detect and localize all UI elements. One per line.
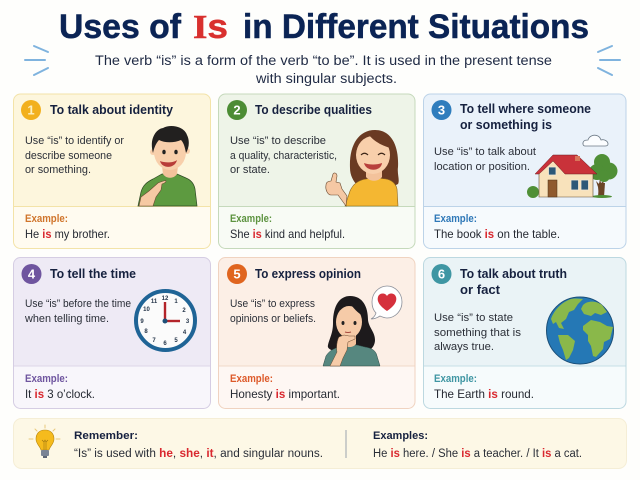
illustration: globe (546, 297, 614, 364)
description 2 (230, 135, 337, 176)
badge 1: 1 (27, 102, 35, 118)
illustration: smiling girl thumbs up (326, 130, 399, 206)
description 5: opinions or beliefs. (230, 313, 316, 325)
description 4: Use “is” before the time (25, 298, 131, 310)
title: Is (193, 8, 228, 46)
badge 1 (21, 100, 41, 120)
badge 6 (432, 264, 452, 284)
title: Uses of (59, 8, 182, 46)
example label 3: Example: (434, 213, 477, 225)
decoration: right rays (598, 46, 620, 75)
panel: remember bar (14, 418, 626, 468)
title: in Different Situations (243, 8, 589, 46)
panel: opinion (218, 258, 415, 408)
example label 1: Example: (25, 213, 68, 225)
illustration: clock showing 3 o'clock: 2 (182, 308, 186, 314)
illustration: clock showing 3 o'clock: 1 (174, 299, 178, 305)
examples text: He is here. / She is a teacher. / It is a cat. (373, 448, 582, 460)
description 3: location or position. (434, 161, 530, 173)
illustration: clock showing 3 o'clock: 5 (174, 338, 178, 344)
example label 2: Example: (230, 213, 272, 225)
description 5 (230, 298, 316, 325)
example label 5: Example: (230, 373, 273, 385)
title (59, 8, 589, 46)
heading 6: or fact (460, 282, 501, 297)
illustration: clock showing 3 o'clock: 4 (183, 330, 187, 336)
badge 4: 4 (28, 266, 36, 282)
description 4: when telling time. (24, 313, 109, 325)
badge 5 (227, 264, 247, 284)
description 6: always true. (434, 341, 494, 353)
description 1: or something. (25, 164, 91, 176)
illustration: clock showing 3 o'clock: 12 (162, 296, 169, 302)
description 1: Use “is” to identify or (25, 135, 124, 147)
heading 3 (460, 101, 591, 132)
description 1: describe someone (25, 150, 112, 162)
subtitle (95, 53, 552, 86)
decoration: left rays (25, 46, 48, 75)
example sentence 3: The book is on the table. (434, 227, 560, 241)
heading 5: To express opinion (255, 266, 361, 281)
remember text (74, 430, 323, 460)
illustration: clock showing 3 o'clock: 9 (140, 319, 144, 325)
heading 3: or something is (460, 117, 552, 132)
heading 4: To tell the time (50, 266, 136, 281)
icon: speech bubble with heart (371, 286, 402, 319)
description 6: Use “is” to state (434, 312, 513, 324)
example sentence 6: The Earth is round. (434, 387, 534, 401)
example sentence 2: She is kind and helpful. (230, 227, 345, 241)
description 2: or state. (230, 164, 270, 176)
example sentence 1: He is my brother. (25, 227, 110, 241)
description 6 (434, 312, 521, 353)
illustration: clock showing 3 o'clock (136, 291, 195, 350)
illustration: clock showing 3 o'clock: 7 (152, 338, 156, 344)
icon: light bulb (29, 425, 60, 458)
illustration: clock showing 3 o'clock: 3 (186, 319, 190, 325)
subtitle: The verb “is” is a form of the verb “to be”. It is used in the present tense (95, 53, 552, 68)
panel: time (14, 258, 210, 408)
badge 4 (22, 264, 42, 284)
examples text: Examples: (373, 430, 428, 442)
illustration: clock showing 3 o'clock: 6 (163, 341, 167, 347)
panel: location (424, 94, 626, 248)
example label 4: Example: (25, 373, 68, 385)
badge 2: 2 (233, 102, 241, 118)
illustration: boy pointing at himself (138, 126, 197, 206)
badge 6: 6 (438, 266, 445, 282)
example sentence 4: It is 3 o’clock. (25, 387, 95, 401)
badge 2 (227, 100, 247, 120)
examples text (373, 430, 582, 460)
badge 3 (432, 100, 452, 120)
heading 2: To describe qualities (255, 102, 372, 117)
description 1 (25, 135, 124, 176)
description 2: Use “is” to describe (230, 135, 326, 147)
remember text: “Is” is used with he, she, it, and singular nouns. (74, 448, 323, 460)
subtitle: with singular subjects. (255, 71, 397, 86)
description 4 (24, 298, 131, 325)
panel: truth or fact (424, 258, 626, 408)
panel: qualities (218, 94, 415, 248)
description 2: a quality, characteristic, (230, 150, 337, 162)
panel: identity (14, 94, 210, 248)
description 3 (434, 146, 537, 173)
example sentence 5: Honesty is important. (230, 387, 340, 401)
heading 6 (460, 266, 567, 297)
example label 6: Example: (434, 373, 477, 385)
badge 3: 3 (438, 102, 445, 118)
heading 6: To talk about truth (460, 266, 567, 281)
illustration: clock showing 3 o'clock: 11 (151, 299, 158, 305)
badge 5: 5 (233, 266, 241, 282)
description 3: Use “is” to talk about (434, 146, 537, 158)
illustration: house, tree and cloud (527, 135, 618, 198)
heading 1: To talk about identity (50, 102, 174, 117)
illustration: thinking woman (323, 296, 380, 366)
description 6: something that is (434, 327, 521, 339)
heading 3: To tell where someone (460, 101, 591, 116)
remember text: Remember: (74, 430, 138, 442)
illustration: clock showing 3 o'clock: 8 (144, 329, 148, 335)
illustration: clock showing 3 o'clock: 10 (143, 307, 150, 313)
description 5: Use “is” to express (230, 298, 315, 310)
